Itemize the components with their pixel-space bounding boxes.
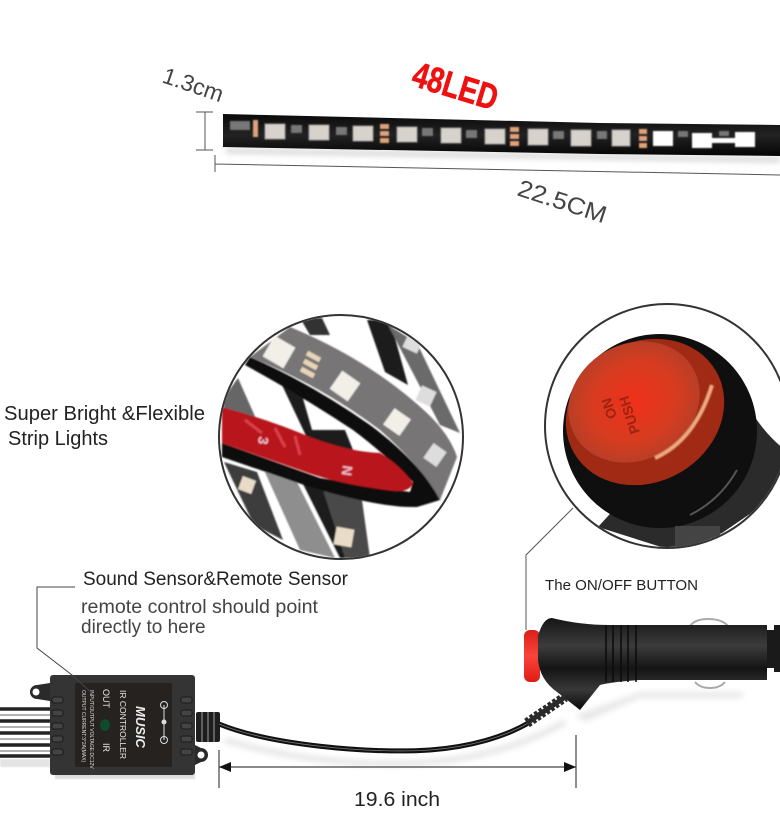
text: super bright strip lights: Super Bright &Flexible	[4, 403, 205, 425]
dimension: cable length	[219, 735, 576, 788]
text: on/off button: The ON/OFF BUTTON	[545, 577, 698, 594]
barrel	[599, 418, 780, 547]
red adhesive tape	[222, 407, 413, 491]
cable shadow	[225, 722, 565, 763]
bright end LEDs	[653, 131, 755, 148]
label: 19.6 inch: 19.6 inch	[354, 789, 440, 811]
black strip backing	[222, 357, 440, 507]
strain relief	[196, 712, 220, 742]
IR controller: OUT	[101, 689, 111, 708]
label: 1.3cm height: 1.3cm	[159, 62, 227, 107]
background strips	[224, 378, 256, 418]
LED strip	[223, 114, 780, 162]
strip LEDs	[263, 336, 295, 368]
detail circle: flexible strip: 3	[255, 436, 272, 446]
text: remote note: remote control should point	[81, 597, 319, 618]
red button face	[568, 342, 700, 462]
detail circle: on/off button	[539, 304, 780, 552]
IR controller	[30, 675, 208, 779]
text: super bright strip lights: Strip Lights	[8, 428, 108, 450]
output wires	[0, 709, 50, 767]
copper solder pads	[253, 120, 647, 148]
dimension: strip length line	[215, 155, 780, 175]
small resistors	[291, 125, 729, 139]
detail circle: flexible strip	[219, 315, 463, 559]
translucent LED strip	[250, 327, 457, 500]
detail circle: on/off button: PUSH	[616, 394, 643, 436]
text: sound sensor heading: Sound Sensor&Remote Sensor	[83, 569, 349, 590]
detail circle: on/off button: ON	[598, 396, 620, 421]
text: remote note: directly to here	[81, 617, 206, 638]
LED chips	[265, 124, 630, 146]
IR controller: IR CONTROLLER	[118, 690, 128, 759]
cable	[219, 722, 530, 751]
IR controller: IR	[101, 743, 111, 753]
label: 48LED: 48LED	[408, 54, 503, 118]
IR controller: MUSIC	[133, 706, 148, 748]
ribbed cord boot	[527, 697, 565, 723]
red button side	[566, 338, 724, 486]
IR controller: OUTPUT CURRENT:3*2A(MAX)	[80, 690, 86, 762]
detail circle: flexible strip: N	[339, 465, 356, 477]
black collar	[563, 334, 757, 528]
strip end cap glare	[230, 121, 250, 130]
label: 22.5CM: 22.5CM	[514, 175, 610, 229]
leader line: button to plug	[526, 508, 573, 630]
leader line: sensor	[37, 587, 95, 696]
IR controller: INPUT/OUTPUT VOLTAGE:DC12V	[88, 690, 94, 769]
dimension: strip height bracket	[196, 112, 213, 150]
car plug	[524, 618, 780, 723]
